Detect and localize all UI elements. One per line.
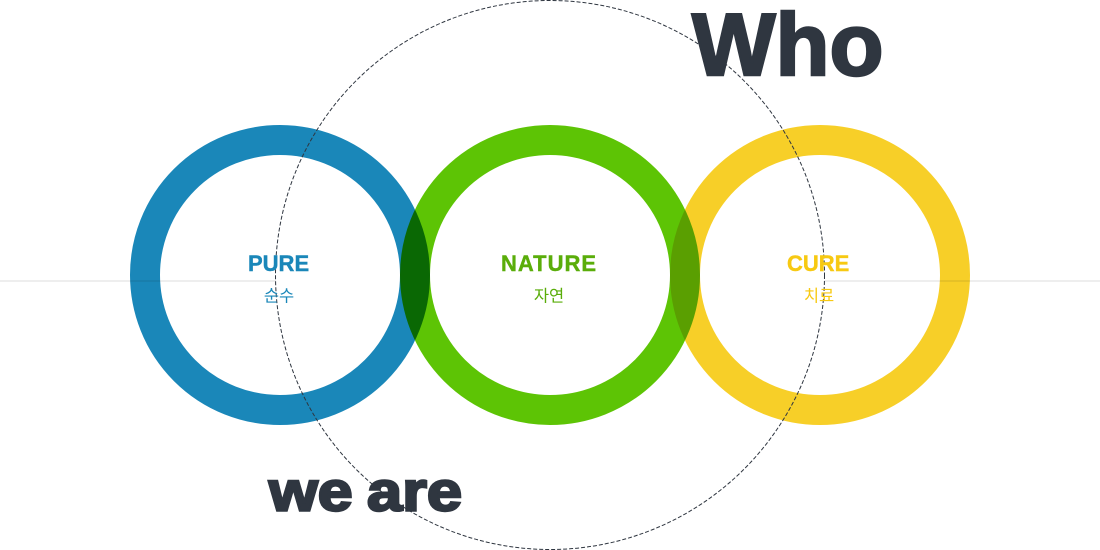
label korean: pure: 순수 bbox=[264, 286, 294, 306]
label title: CURE: CURE bbox=[787, 251, 849, 276]
label korean: cure: 치료 bbox=[804, 286, 834, 306]
heading: we are: are bbox=[367, 460, 462, 523]
label title: NATURE: NATURE bbox=[501, 251, 596, 276]
label: cure bbox=[787, 251, 849, 306]
heading: we are: we bbox=[268, 460, 353, 523]
label korean: nature: 자연 bbox=[534, 286, 564, 306]
axis line: right bbox=[824, 280, 1100, 282]
ring: pure bbox=[145, 140, 415, 410]
axis line: left bbox=[0, 280, 276, 282]
label: nature bbox=[501, 251, 596, 306]
label title: PURE: PURE bbox=[248, 251, 309, 276]
heading: we are bbox=[268, 460, 462, 523]
ring: cure bbox=[685, 140, 955, 410]
label: pure bbox=[248, 251, 309, 306]
ring: nature bbox=[415, 140, 685, 410]
dashed orbit circle bbox=[276, 0, 824, 550]
